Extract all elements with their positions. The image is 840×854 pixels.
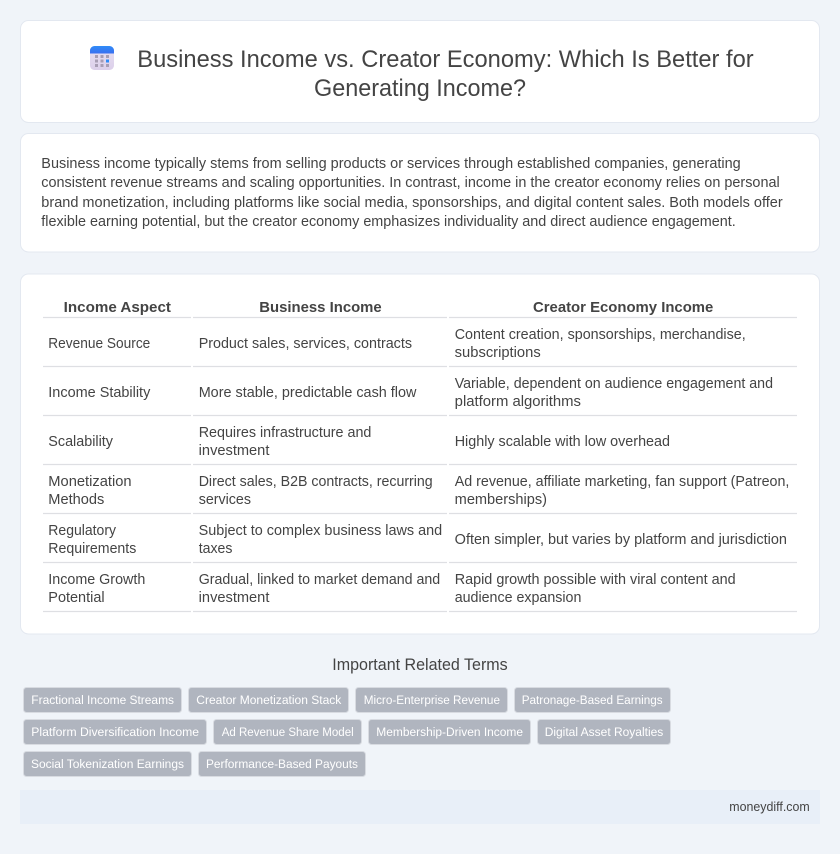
panel: introduction text: consistent revenue streams and scaling opportunities. In contrast, income in the creator economy relies on personal	[41, 175, 780, 191]
panel: related term tags: Performance-Based Payouts	[206, 757, 358, 771]
row: income growth potential: Gradual, linked to market demand and	[199, 572, 440, 588]
panel: related term tags	[24, 688, 670, 776]
table header row: Creator Economy Income	[533, 299, 713, 316]
panel: related term tags: Social Tokenization Earnings	[31, 757, 184, 771]
row: monetization methods: Ad revenue, affiliate marketing, fan support (Patreon,	[455, 474, 789, 490]
row: regulatory requirements: taxes	[199, 541, 232, 557]
row: income growth potential: audience expansion	[455, 590, 581, 606]
table header row: Income Aspect	[64, 299, 171, 316]
row: revenue source: Content creation, sponsorships, merchandise,	[455, 327, 746, 343]
row: regulatory requirements: Requirements	[48, 541, 136, 557]
panel: header	[20, 20, 820, 122]
row: regulatory requirements: Regulatory	[48, 523, 117, 539]
row: monetization methods: Methods	[48, 492, 104, 508]
panel: related term tags: Patronage-Based Earnings	[522, 693, 663, 707]
row: income stability: More stable, predictable cash flow	[199, 385, 417, 401]
title: Generating Income?	[314, 75, 526, 102]
row: monetization methods: memberships)	[455, 492, 547, 508]
icon: calendar	[90, 46, 114, 70]
panel: introduction text: brand monetization, including platforms like social media, sponsorships, and digital content sales. Both models offer	[41, 195, 783, 211]
panel: related term tags: Micro-Enterprise Revenue	[364, 693, 500, 707]
row: regulatory requirements	[43, 523, 797, 562]
heading: important related terms: Important Related Terms	[332, 656, 508, 674]
row: regulatory requirements: Subject to complex business laws and	[199, 523, 442, 539]
panel: introduction text	[20, 134, 820, 252]
row: monetization methods	[43, 474, 797, 514]
row: revenue source: subscriptions	[455, 345, 541, 361]
row: income stability: platform algorithms	[455, 394, 581, 410]
title: Business Income vs. Creator Economy: Which Is Better for	[137, 46, 754, 73]
row: income stability	[43, 376, 797, 416]
panel: introduction text: Business income typically stems from selling products or services through established companies, generating	[41, 156, 741, 172]
row: income growth potential: Income Growth	[48, 572, 145, 588]
row: income growth potential: Potential	[48, 590, 105, 606]
row: monetization methods: Direct sales, B2B contracts, recurring	[199, 474, 433, 490]
panel: related term tags: Digital Asset Royalties	[545, 725, 663, 739]
footer	[20, 790, 820, 824]
table header row	[43, 299, 797, 318]
footer: moneydiff.com	[729, 799, 810, 814]
row: revenue source	[43, 327, 797, 366]
row: monetization methods: Monetization	[48, 474, 132, 490]
row: income stability: Income Stability	[48, 385, 151, 401]
row: revenue source: Revenue Source	[48, 336, 150, 352]
row: income growth potential: investment	[199, 590, 269, 606]
row: revenue source: Product sales, services, contracts	[199, 336, 412, 352]
row: income stability: Variable, dependent on audience engagement and	[455, 376, 773, 392]
panel: related term tags: Platform Diversification Income	[31, 725, 199, 739]
row: scalability: Highly scalable with low overhead	[455, 434, 670, 450]
panel: comparison table	[20, 274, 820, 634]
row: income growth potential: Rapid growth possible with viral content and	[455, 572, 736, 588]
row: scalability	[43, 425, 797, 464]
row: regulatory requirements: Often simpler, but varies by platform and jurisdiction	[455, 532, 787, 548]
row: scalability: Requires infrastructure and	[199, 425, 371, 441]
panel: related term tags: Fractional Income Streams	[31, 693, 174, 707]
panel: related term tags: Creator Monetization Stack	[196, 693, 342, 707]
row: monetization methods: services	[199, 492, 251, 508]
table header row: Business Income	[259, 299, 382, 316]
row: income growth potential	[43, 572, 797, 612]
title	[137, 46, 754, 102]
row: scalability: investment	[199, 443, 269, 459]
row: scalability: Scalability	[48, 434, 114, 450]
panel: related term tags: Membership-Driven Income	[376, 725, 523, 739]
panel: introduction text: flexible earning potential, but the creator economy emphasizes individuality and direct audience engagement.	[41, 214, 736, 230]
panel: related term tags: Ad Revenue Share Model	[222, 725, 354, 739]
